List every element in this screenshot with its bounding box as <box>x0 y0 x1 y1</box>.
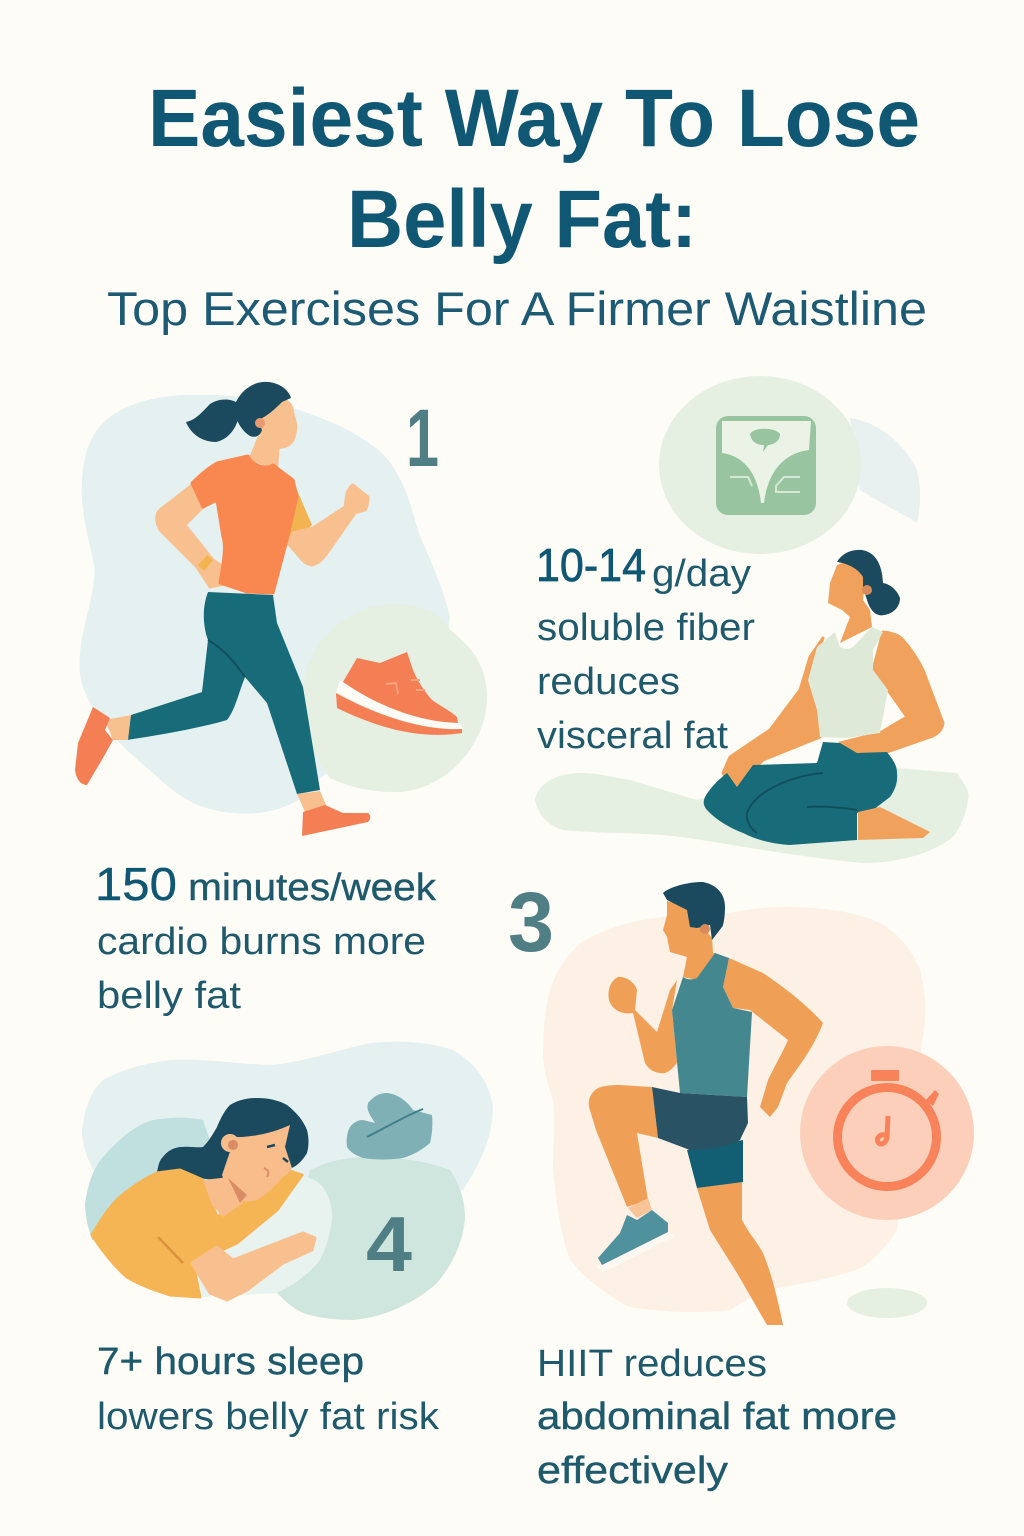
timer circle <box>800 1046 974 1220</box>
tank top <box>808 627 888 738</box>
icon: green scale <box>716 416 816 515</box>
shoe sole <box>596 1232 675 1272</box>
hair <box>235 382 291 437</box>
background blob: sleep <box>82 1042 493 1250</box>
pillow <box>193 1173 332 1297</box>
text block: fiber: 10-14 <box>536 539 646 591</box>
pale blue blob behind scale <box>850 418 920 523</box>
shirt crease <box>158 1237 183 1263</box>
figure: HIIT man <box>589 882 823 1325</box>
shadow pad <box>847 1288 927 1318</box>
figure: sleeping woman <box>92 1098 332 1300</box>
title: Easiest Way To Lose <box>148 73 920 164</box>
back leg <box>697 1182 783 1325</box>
text block: fiber: reduces <box>537 661 680 703</box>
ear <box>221 1134 239 1152</box>
title <box>148 73 920 265</box>
text block: HIIT: HIIT reduces <box>537 1343 767 1385</box>
hair <box>157 1098 308 1180</box>
number 3: 3 <box>508 875 554 969</box>
front ankle <box>297 791 327 812</box>
text block: HIIT: abdominal fat more <box>537 1396 897 1438</box>
hair <box>837 550 900 615</box>
neck shadow <box>228 1178 247 1203</box>
shoe circle <box>303 604 487 792</box>
text block: fiber: g/day <box>652 553 751 595</box>
arm <box>192 1233 315 1300</box>
left arm <box>723 638 823 787</box>
text block: cardio: 150 minutes/week <box>95 858 437 910</box>
ear <box>862 585 872 595</box>
text block: fiber: soluble fiber <box>537 607 755 649</box>
background blob: HIIT <box>543 907 925 1312</box>
shirt <box>192 456 297 593</box>
panel: HIIT <box>543 882 974 1325</box>
right arm <box>840 632 943 753</box>
eyes and mouth <box>267 1145 288 1162</box>
leggings fold lines <box>747 773 857 833</box>
shirt <box>92 1170 302 1297</box>
shoe <box>598 1210 668 1265</box>
leggings seated <box>704 742 897 845</box>
right arm <box>723 958 823 1117</box>
green blob <box>277 1157 465 1320</box>
text block: sleep <box>97 1341 440 1438</box>
text block: cardio: belly fat <box>97 975 241 1017</box>
mat <box>535 768 968 863</box>
left arm <box>608 977 677 1073</box>
number 4: 4 <box>366 1200 412 1288</box>
panel: fiber <box>535 376 968 863</box>
hair <box>663 882 725 940</box>
face <box>222 1125 292 1202</box>
icon: stopwatch <box>838 1070 939 1186</box>
yellow sleeve <box>287 490 312 543</box>
text block: HIIT: effectively <box>537 1450 728 1492</box>
ponytail <box>186 400 238 442</box>
shorts <box>652 1087 748 1150</box>
panel: cardio runner <box>75 382 487 836</box>
ear <box>255 418 265 428</box>
figure: seated woman <box>704 550 943 845</box>
tank top <box>672 953 752 1097</box>
leg shadow <box>208 640 245 677</box>
back shoe <box>75 707 113 785</box>
front shoe <box>302 805 370 836</box>
front arm <box>287 485 368 565</box>
text block: cardio <box>95 858 437 1017</box>
text block: sleep: lowers belly fat risk <box>97 1396 440 1438</box>
text block: sleep: 7+ hours sleep <box>97 1341 364 1383</box>
neck and face <box>663 901 716 980</box>
panel: sleep <box>82 1042 493 1320</box>
teal blob left <box>85 1118 230 1240</box>
figure: runner <box>75 382 370 836</box>
background blob: runner <box>79 395 450 814</box>
face <box>256 398 297 449</box>
title: Belly Fat: <box>347 174 697 265</box>
back arm <box>157 485 233 587</box>
scale circle <box>659 376 861 554</box>
text block: HIIT <box>537 1343 897 1492</box>
icon: running shoe <box>336 652 463 735</box>
raised thigh <box>589 1085 658 1207</box>
shorts lower <box>687 1140 743 1188</box>
neck and face <box>828 560 872 643</box>
icon: grey-blue stone <box>347 1093 432 1160</box>
neck <box>203 1177 243 1217</box>
subtitle: Top Exercises For A Firmer Waistline <box>107 282 927 335</box>
foot <box>858 807 930 840</box>
neck <box>248 436 280 470</box>
number 1: 1 <box>406 393 439 484</box>
text block: fiber: visceral fat <box>537 715 728 757</box>
text block: fiber <box>536 539 755 757</box>
leggings <box>127 592 320 794</box>
back ankle <box>105 715 131 740</box>
sock <box>628 1198 652 1218</box>
text block: cardio: cardio burns more <box>97 921 426 963</box>
wristband <box>198 555 213 571</box>
ear <box>700 924 710 934</box>
